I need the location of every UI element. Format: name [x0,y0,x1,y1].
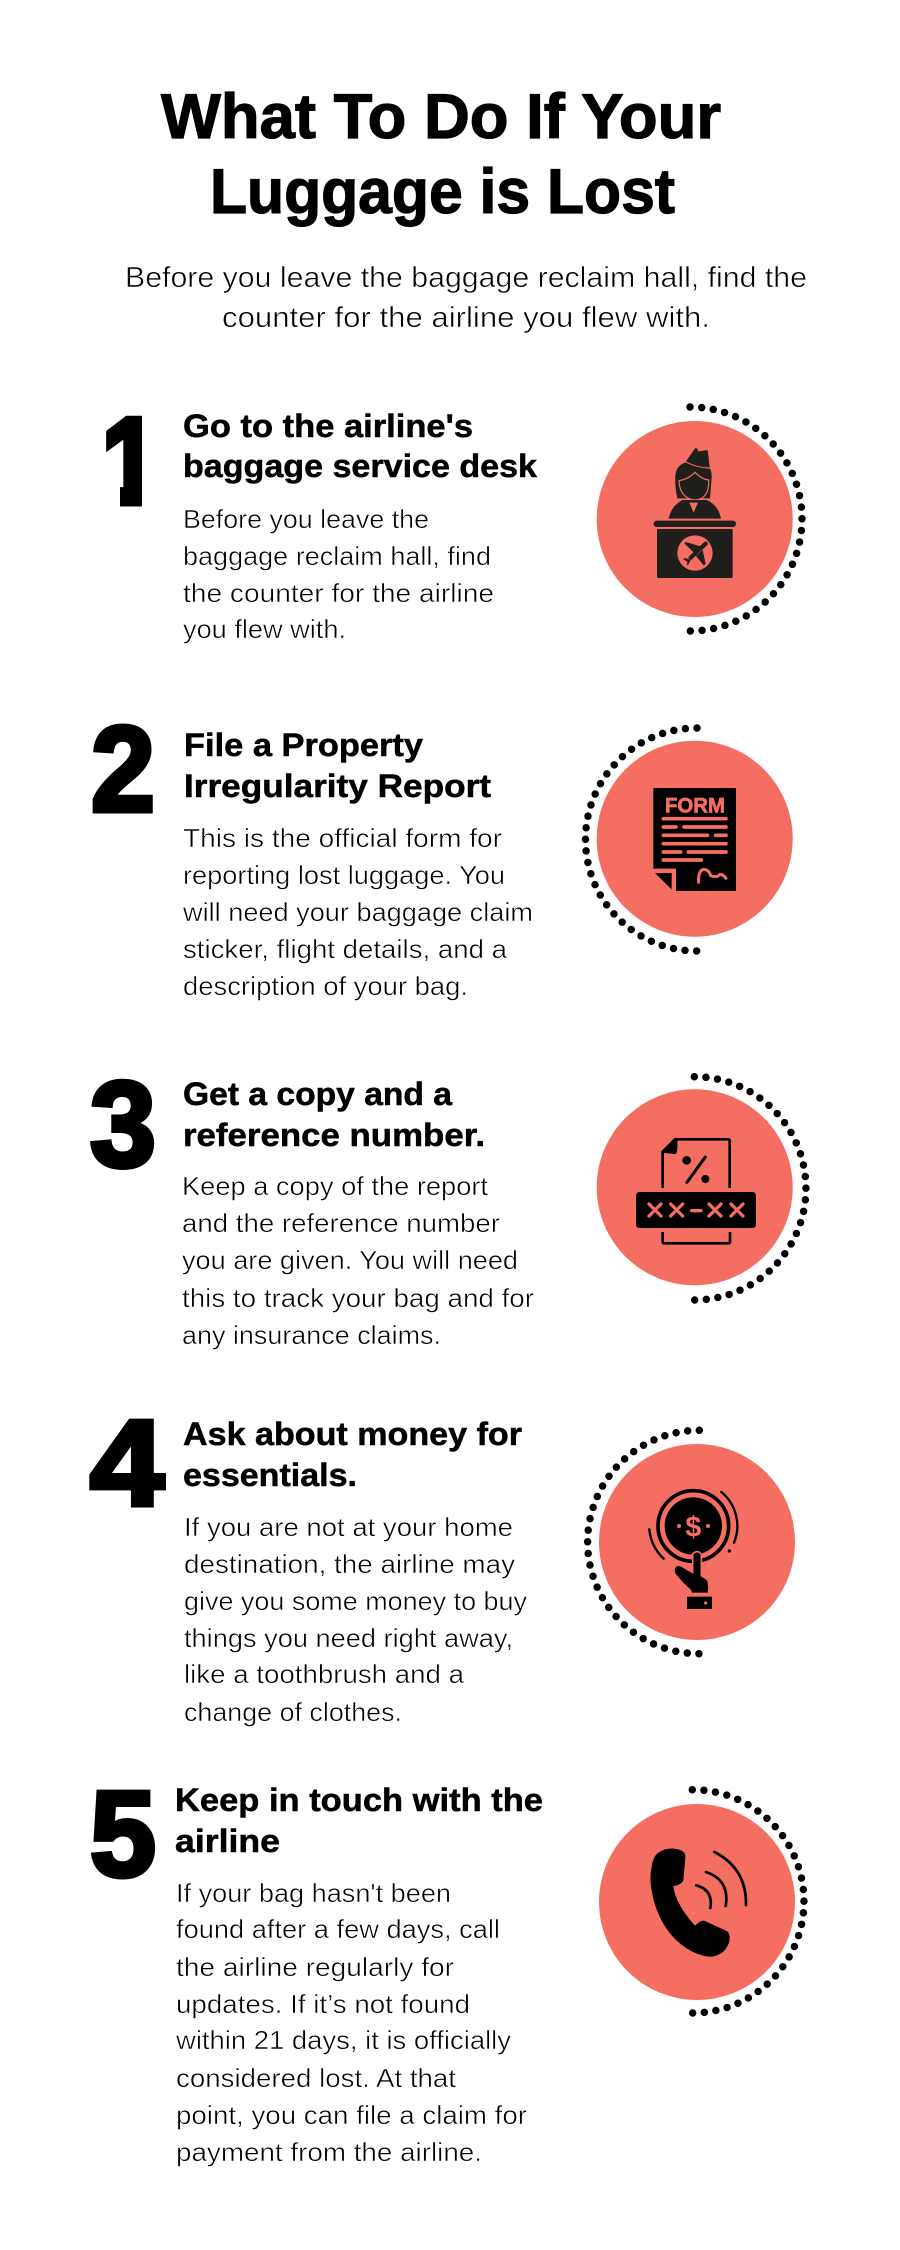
circle 4 [599,1444,795,1640]
number 3: 3 [90,1056,156,1192]
circle 2 [597,741,793,937]
text: step 5: considered lost. At that [176,2063,457,2093]
text: step 5: found after a few days, call [176,1914,500,1944]
heading: step 3: Get a copy and a [183,1076,452,1112]
title [161,82,721,227]
text: step 3 [182,1171,534,1350]
text: step 1 [183,504,494,644]
dotted arc 1 [690,407,802,631]
icon: flight attendant at desk [654,448,736,578]
heading: step 2: Irregularity Report [184,768,491,804]
panel: step 5 [90,1766,804,2167]
panel: step 3 [90,1056,806,1350]
heading: step 1: baggage service desk [183,448,537,484]
heading: step 2: File a Property [184,727,423,763]
dotted arc 2 [586,728,697,951]
text: step 5: the airline regularly for [176,1952,454,1982]
circle 1 [597,421,793,617]
text: step 2: reporting lost luggage. You [183,860,505,890]
title: What To Do If Your [161,82,721,152]
heading: step 2 [184,727,491,804]
text: step 4: destination, the airline may [184,1549,515,1579]
text: step 5: payment from the airline. [176,2137,482,2167]
heading: step 1: Go to the airline's [183,408,473,444]
heading: step 5: airline [175,1823,280,1859]
heading: step 4: essentials. [183,1457,357,1493]
text: step 1: you flew with. [183,614,346,644]
heading: step 4: Ask about money for [183,1416,522,1452]
icon: form document: FORM [665,792,725,817]
text: step 5: within 21 days, it is officially [175,2025,511,2055]
dotted arc 3 [694,1077,806,1300]
number 1: 1 [102,393,160,529]
text: step 4: change of clothes. [184,1697,402,1727]
heading: step 3 [183,1076,485,1153]
text: step 1: the counter for the airline [183,578,494,608]
subtitle [125,262,807,334]
text: step 2: sticker, flight details, and a [183,934,508,964]
subtitle: counter for the airline you flew with. [222,302,710,334]
text: step 1: Before you leave the [183,504,429,534]
text: step 5 [175,1878,527,2167]
text: step 4: things you need right away, [184,1623,513,1653]
text: step 2: will need your baggage claim [182,897,533,927]
text: step 4 [184,1512,527,1727]
icon: form document [653,788,736,891]
text: step 4: like a toothbrush and a [184,1659,465,1689]
number 2: 2 [91,701,155,837]
text: step 4: give you some money to buy [184,1586,527,1616]
heading: step 5: Keep in touch with the [175,1782,543,1818]
heading: step 4 [183,1416,522,1493]
text: step 1: baggage reclaim hall, find [183,541,491,571]
heading: step 3: reference number. [183,1117,485,1153]
text: step 5: updates. If it’s not found [176,1989,470,2019]
text: step 4: If you are not at your home [184,1512,513,1542]
text: step 5: point, you can file a claim for [176,2100,527,2130]
circle 5 [599,1804,795,2000]
icon: document with reference code [636,1138,756,1243]
text: step 3: any insurance claims. [182,1320,441,1350]
panel: step 4 [90,1395,795,1727]
number 4: 4 [90,1395,164,1531]
text: step 2: description of your bag. [183,971,468,1001]
heading: step 5 [175,1782,543,1859]
dotted arc 4 [588,1430,699,1654]
icon: finger pressing coin: $ [685,1511,701,1543]
subtitle: Before you leave the baggage reclaim hall, find the [125,262,807,294]
text: step 2 [182,823,533,1001]
text: step 5: If your bag hasn't been [176,1878,451,1908]
circle 3 [597,1089,793,1285]
title: Luggage is Lost [210,157,675,227]
panel: step 1 [102,393,802,644]
text: step 2: This is the official form for [183,823,502,853]
text: step 3: this to track your bag and for [182,1283,534,1313]
text: step 3: Keep a copy of the report [182,1171,489,1201]
number 5: 5 [90,1766,156,1902]
dotted arc 5 [692,1790,804,2013]
panel: step 2 [91,701,793,1001]
icon: finger pressing coin [649,1491,737,1609]
text: step 3: you are given. You will need [182,1245,518,1275]
heading: step 1 [183,408,537,484]
icon: phone with signal [650,1849,746,1957]
text: step 3: and the reference number [182,1208,500,1238]
